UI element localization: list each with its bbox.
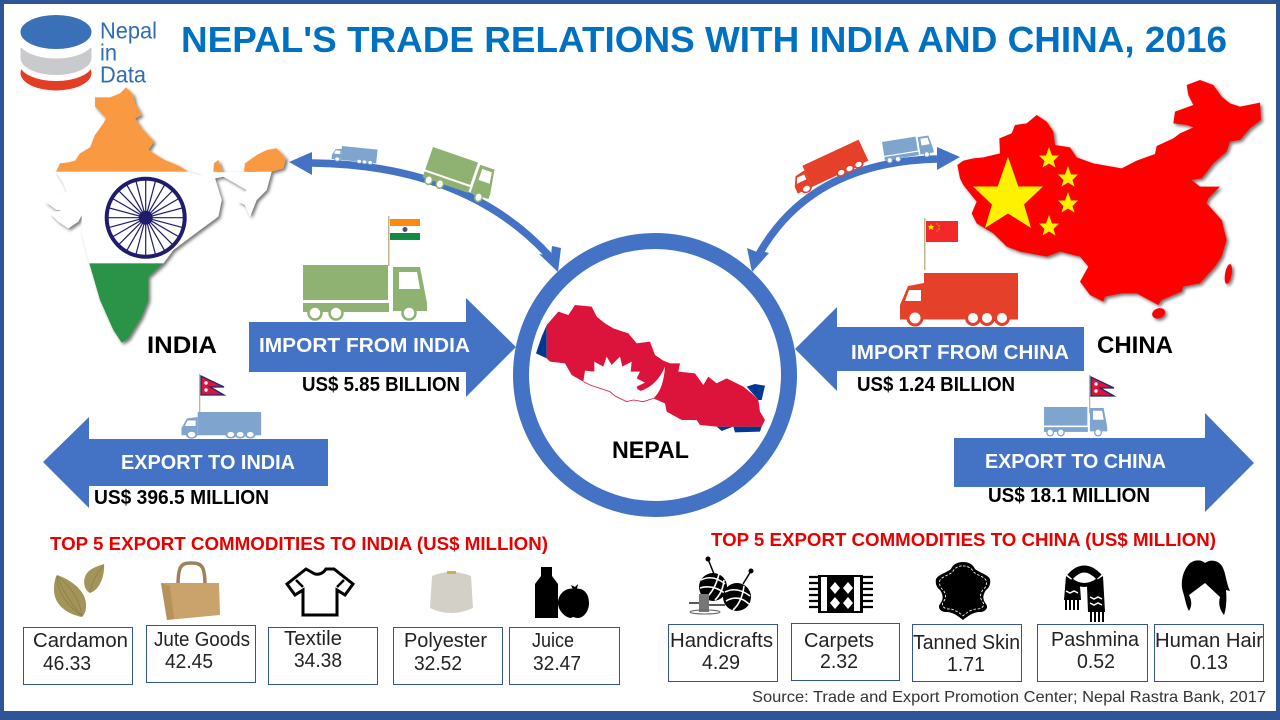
box: Human Hair: Human Hair — [1155, 630, 1263, 652]
value: export to China: US$ 18.1 MILLION — [988, 485, 1150, 507]
box: Jute Goods: Jute Goods — [154, 629, 250, 651]
truck with Chinese flag — [900, 218, 1018, 325]
value: import from China: US$ 1.24 BILLION — [857, 374, 1015, 396]
icon: t-shirt — [287, 569, 353, 615]
box: Tanned Skin: 1.71 — [947, 654, 985, 676]
value: import from India: US$ 5.85 BILLION — [302, 374, 460, 396]
box: Pashmina: Pashmina — [1051, 629, 1140, 651]
map: China with flag stars — [957, 80, 1261, 320]
box: Polyester: Polyester — [404, 630, 487, 652]
box: Carpets: 2.32 — [820, 651, 858, 673]
box: Handicrafts: Handicrafts — [670, 630, 773, 652]
box: Handicrafts — [668, 624, 778, 682]
box: Textile: 34.38 — [294, 650, 342, 672]
logo: Nepal in Data: Data — [100, 62, 146, 88]
icon: juice and apple — [535, 567, 589, 618]
box: Cardamon: 46.33 — [43, 653, 91, 675]
label: India: INDIA — [147, 332, 217, 359]
box: Carpets: Carpets — [804, 630, 874, 652]
truck: small blue on China arc — [882, 134, 934, 164]
logo: Nepal in Data: Nepal — [100, 18, 157, 44]
icon: pashmina scarf — [1064, 569, 1105, 622]
box: Jute Goods — [146, 626, 256, 682]
heading: top exports to India: TOP 5 EXPORT COMMODITIES TO INDIA (US$ MILLION) — [50, 534, 548, 554]
box: Polyester: 32.52 — [414, 653, 462, 675]
box: Human Hair — [1154, 624, 1264, 682]
value: export to India: US$ 396.5 MILLION — [94, 487, 269, 509]
arrow: import from China: IMPORT FROM CHINA — [851, 342, 1069, 364]
icon: carpet — [809, 575, 873, 613]
box: Textile — [268, 628, 378, 684]
box: Tanned Skin — [912, 624, 1022, 682]
arrow: import from India — [249, 298, 516, 397]
Nepal circle with map: NEPAL — [612, 437, 689, 464]
title: NEPAL'S TRADE RELATIONS WITH INDIA AND CHINA, 2016 — [181, 19, 1227, 60]
box: Juice: 32.47 — [533, 653, 581, 675]
box: Cardamon: Cardamon — [33, 630, 128, 652]
box: Juice — [510, 628, 620, 684]
box: Polyester — [394, 628, 502, 684]
label: China: CHINA — [1097, 332, 1173, 359]
icon: cardamom — [54, 564, 104, 617]
icon: yarn and spool — [689, 556, 754, 614]
source note: Source: Trade and Export Promotion Center; Nepal Rastra Bank, 2017 — [752, 689, 1266, 706]
logo: Nepal in Data — [20, 15, 157, 90]
box: Human Hair: 0.13 — [1190, 652, 1228, 674]
box: Jute Goods: 42.45 — [165, 651, 213, 673]
box: Cardamon — [24, 628, 132, 684]
arrow: import from China — [795, 307, 1084, 391]
arrow: export to India: EXPORT TO INDIA — [121, 452, 295, 474]
truck: small red on China arc — [788, 140, 870, 196]
arrow: export to India — [43, 417, 328, 508]
truck with Indian flag — [303, 216, 427, 320]
box: Pashmina — [1038, 624, 1148, 682]
logo: Nepal in Data: in — [100, 40, 117, 66]
truck with Nepali flag, export to India — [182, 374, 261, 438]
truck: small green on India arc — [421, 147, 499, 205]
arrow: export to China: EXPORT TO CHINA — [985, 451, 1166, 473]
curved arrow: Nepal to China — [747, 147, 960, 272]
icon: jute bag — [161, 563, 220, 620]
icon: polyester cone — [430, 571, 473, 613]
arrow: import from India: IMPORT FROM INDIA — [259, 335, 470, 357]
map: India in flag colours — [45, 87, 286, 343]
box: Textile: Textile — [284, 628, 342, 650]
box: Carpets — [792, 624, 900, 680]
curved arrow: Nepal to India — [289, 152, 561, 272]
box: Tanned Skin: Tanned Skin — [913, 632, 1020, 654]
box: Handicrafts: 4.29 — [702, 652, 740, 674]
heading: top exports to China: TOP 5 EXPORT COMMODITIES TO CHINA (US$ MILLION) — [711, 530, 1216, 550]
icon: human hair — [1182, 560, 1230, 615]
box: Juice: Juice — [532, 630, 574, 652]
truck: small blue on India arc — [331, 145, 378, 165]
box: Pashmina: 0.52 — [1077, 651, 1115, 673]
arrow: export to China — [954, 413, 1254, 512]
icon: tanned skin — [936, 562, 990, 620]
truck with Nepali flag, export to China — [1044, 375, 1114, 436]
Nepal circle with map — [521, 241, 789, 509]
